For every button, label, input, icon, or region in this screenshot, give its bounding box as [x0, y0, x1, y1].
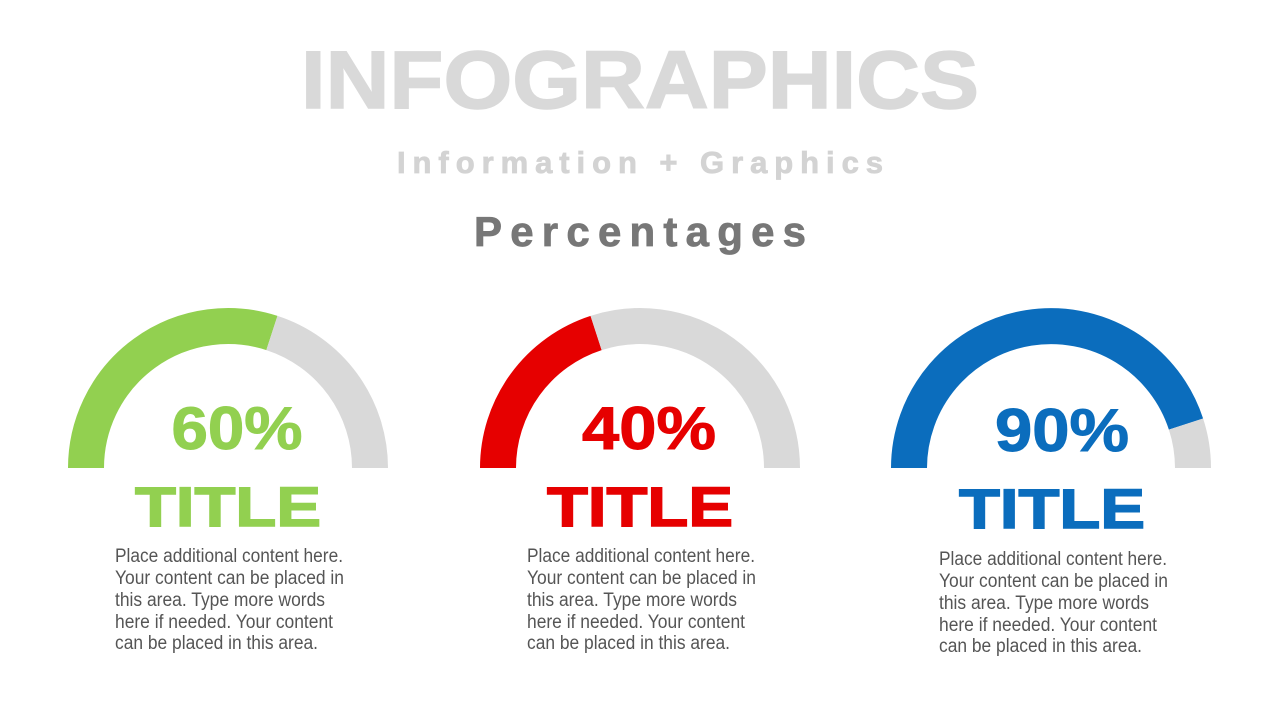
panel: 40% red — [498, 326, 782, 654]
gauge: 40% — [498, 326, 782, 468]
panel title: TITLE — [135, 475, 321, 538]
body text: this area. Type more words — [115, 590, 325, 611]
title: INFOGRAPHICS — [301, 35, 979, 126]
panel: 60% green — [86, 326, 370, 654]
body text: Your content can be placed in — [939, 571, 1168, 592]
body text: Place additional content here. — [115, 546, 343, 567]
gauge: 90% — [909, 326, 1193, 468]
body text: this area. Type more words — [939, 593, 1149, 614]
body text: this area. Type more words — [527, 590, 737, 611]
body text: can be placed in this area. — [939, 636, 1142, 657]
gauge: 60% — [86, 326, 370, 468]
body text: Your content can be placed in — [527, 568, 756, 589]
body text: can be placed in this area. — [115, 633, 318, 654]
value: 60%: 60% — [172, 395, 302, 462]
body text: Place additional content here. — [939, 549, 1167, 570]
body text: Your content can be placed in — [115, 568, 344, 589]
body text: Place additional content here. — [527, 546, 755, 567]
body text: can be placed in this area. — [527, 633, 730, 654]
panel: 90% blue — [909, 326, 1193, 657]
subtitle: Information + Graphics — [397, 145, 883, 180]
heading: Percentages: Percentages — [474, 208, 806, 255]
body text — [527, 546, 756, 654]
body text: here if needed. Your content — [115, 612, 334, 633]
body text — [115, 546, 344, 654]
panel title: TITLE — [959, 477, 1145, 540]
body text — [939, 549, 1168, 657]
value: 40%: 40% — [582, 395, 716, 462]
body text: here if needed. Your content — [527, 612, 746, 633]
panel title: TITLE — [547, 475, 733, 538]
body text: here if needed. Your content — [939, 615, 1158, 636]
value: 90%: 90% — [995, 397, 1129, 464]
